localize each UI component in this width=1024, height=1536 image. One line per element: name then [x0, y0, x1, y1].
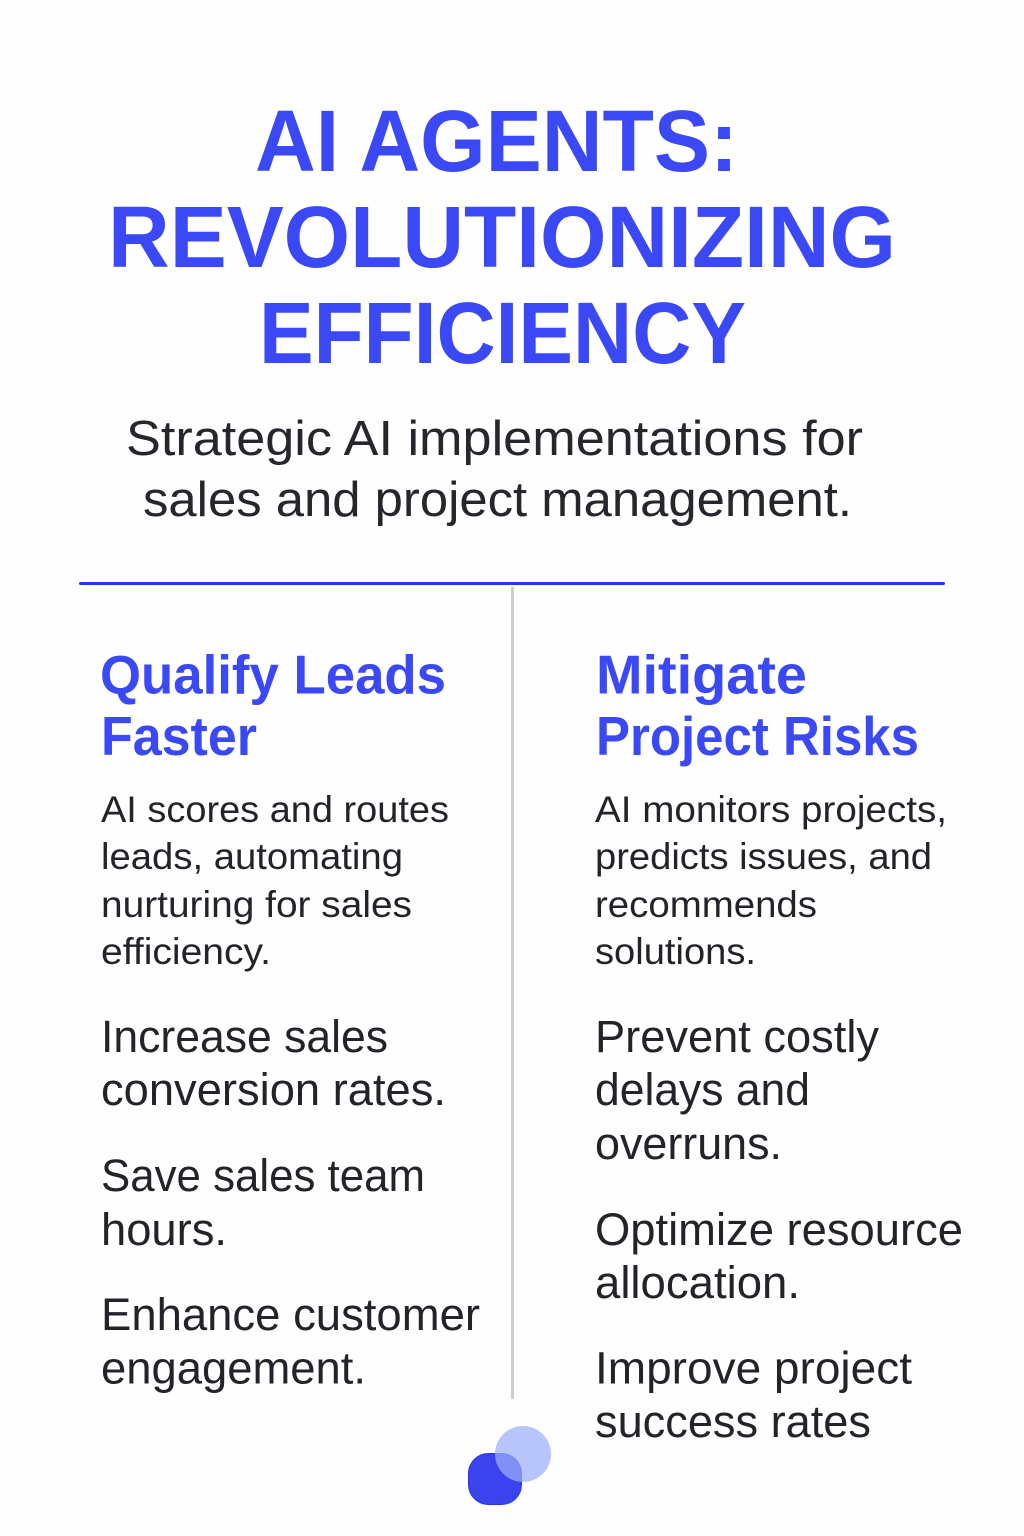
heading: mitigate project risks: Project Risks	[596, 705, 919, 767]
benefit: conversion rates: Increase sales	[101, 1011, 388, 1062]
description: lead scoring	[101, 789, 449, 972]
benefit: customer engagement: Enhance customer	[101, 1289, 480, 1340]
benefit: prevent delays: Prevent costly	[595, 1011, 879, 1062]
heading: qualify leads faster	[100, 644, 446, 767]
title: EFFICIENCY	[259, 285, 746, 382]
title	[108, 93, 896, 382]
icon: overlapping shapes logo	[468, 1426, 551, 1504]
benefit: save hours: Save sales team	[101, 1150, 425, 1201]
benefit: prevent delays	[595, 1011, 879, 1169]
description: project monitoring: recommends	[595, 884, 817, 925]
description: project monitoring	[595, 789, 947, 972]
title: AI AGENTS:	[255, 93, 738, 190]
heading: qualify leads faster: Qualify Leads	[100, 644, 446, 706]
description: project monitoring: AI monitors projects,	[595, 789, 947, 830]
benefit: customer engagement: engagement.	[101, 1342, 366, 1394]
description: project monitoring: predicts issues, and	[595, 836, 932, 877]
subtitle	[126, 412, 863, 527]
benefit: save hours: hours.	[101, 1204, 227, 1255]
benefit: conversion rates	[101, 1011, 446, 1115]
heading: mitigate project risks	[596, 644, 919, 767]
subtitle: Strategic AI implementations for	[126, 412, 863, 466]
benefit: resource allocation: Optimize resource	[595, 1204, 963, 1255]
description: lead scoring: AI scores and routes	[101, 789, 449, 830]
benefit: project success: Improve project	[595, 1342, 913, 1394]
benefit: resource allocation: allocation.	[595, 1257, 800, 1308]
benefit: project success	[595, 1342, 913, 1447]
panel: mitigate project risks	[595, 644, 963, 1447]
heading: qualify leads faster: Faster	[101, 705, 257, 767]
description: lead scoring: leads, automating	[101, 836, 403, 877]
panel: qualify leads faster	[100, 644, 480, 1394]
benefit: save hours	[101, 1150, 425, 1255]
benefit: customer engagement	[101, 1289, 480, 1394]
subtitle: sales and project management.	[143, 473, 852, 527]
title: REVOLUTIONIZING	[108, 189, 896, 286]
benefit: prevent delays: delays and	[595, 1064, 810, 1115]
benefit: prevent delays: overruns.	[595, 1118, 782, 1169]
benefit: conversion rates: conversion rates.	[101, 1064, 446, 1115]
description: project monitoring: solutions.	[595, 931, 756, 972]
benefit: resource allocation	[595, 1204, 963, 1308]
heading: mitigate project risks: Mitigate	[596, 644, 807, 706]
benefit: project success: success rates	[595, 1396, 871, 1447]
description: lead scoring: nurturing for sales	[101, 884, 412, 925]
description: lead scoring: efficiency.	[101, 931, 271, 972]
